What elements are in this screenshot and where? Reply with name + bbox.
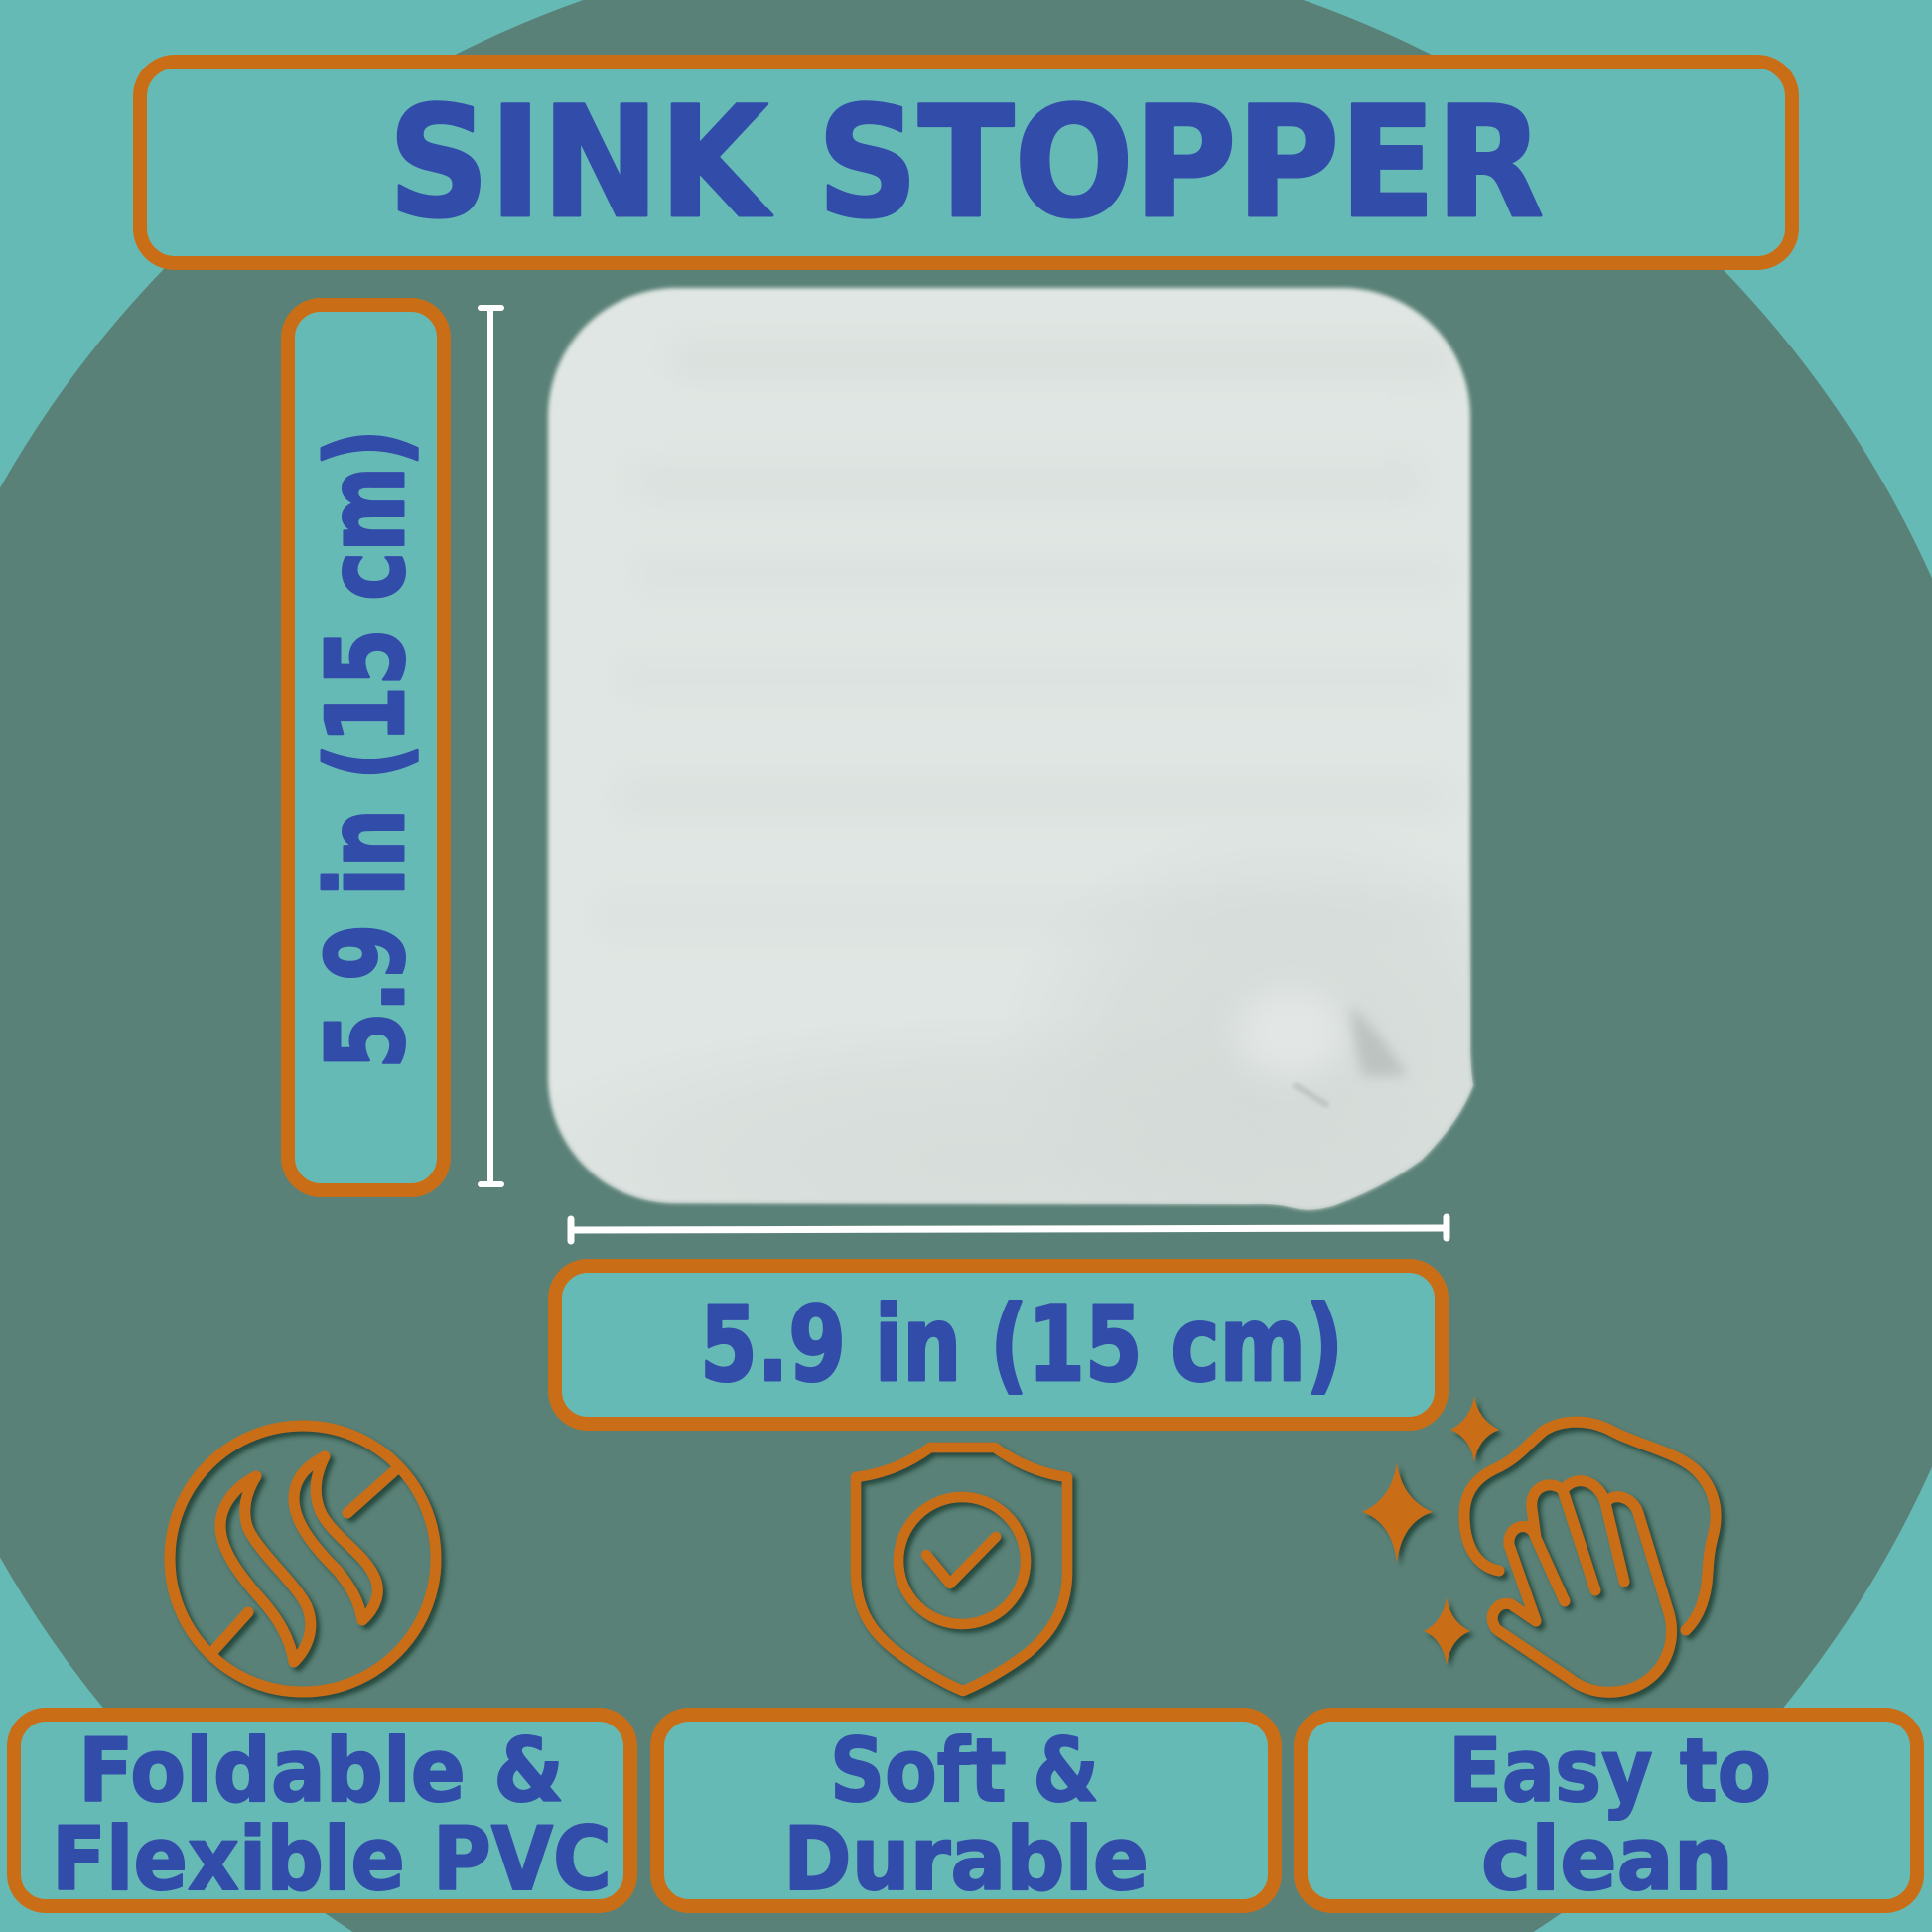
- icon: no steam: [170, 1426, 436, 1692]
- vertical measure line: [481, 308, 501, 1184]
- horizontal dimension label: [555, 1266, 1442, 1424]
- feature box: easy to clean: [1301, 1715, 1917, 1910]
- icon: shield with check: [856, 1448, 1067, 1691]
- product dimple: [1245, 996, 1405, 1108]
- horizontal measure line: [571, 1217, 1447, 1241]
- feature text line 1: Soft &: [830, 1720, 1099, 1822]
- horizontal dimension text: 5.9 in (15 cm): [700, 1284, 1343, 1405]
- vertical dimension label: [288, 305, 444, 1190]
- feature box: foldable and flexible: [14, 1715, 630, 1910]
- feature text line 1: Easy to: [1449, 1720, 1771, 1822]
- feature text line 1: Foldable &: [78, 1720, 564, 1822]
- product corner shading: [1128, 897, 1473, 1209]
- title text: SINK STOPPER: [388, 74, 1544, 252]
- feature text line 2: Durable: [783, 1808, 1149, 1910]
- feature box: soft and durable: [657, 1715, 1275, 1910]
- product: white silicone stopper: [545, 285, 1476, 1213]
- product lower shading: [564, 1124, 1334, 1209]
- feature text line 2: Flexible PVC: [52, 1808, 612, 1910]
- title banner: [140, 62, 1792, 263]
- feature text line 2: clean: [1481, 1808, 1733, 1910]
- icon: hand wiping with sparkles: [1362, 1396, 1716, 1692]
- vertical dimension text: 5.9 in (15 cm): [305, 429, 429, 1069]
